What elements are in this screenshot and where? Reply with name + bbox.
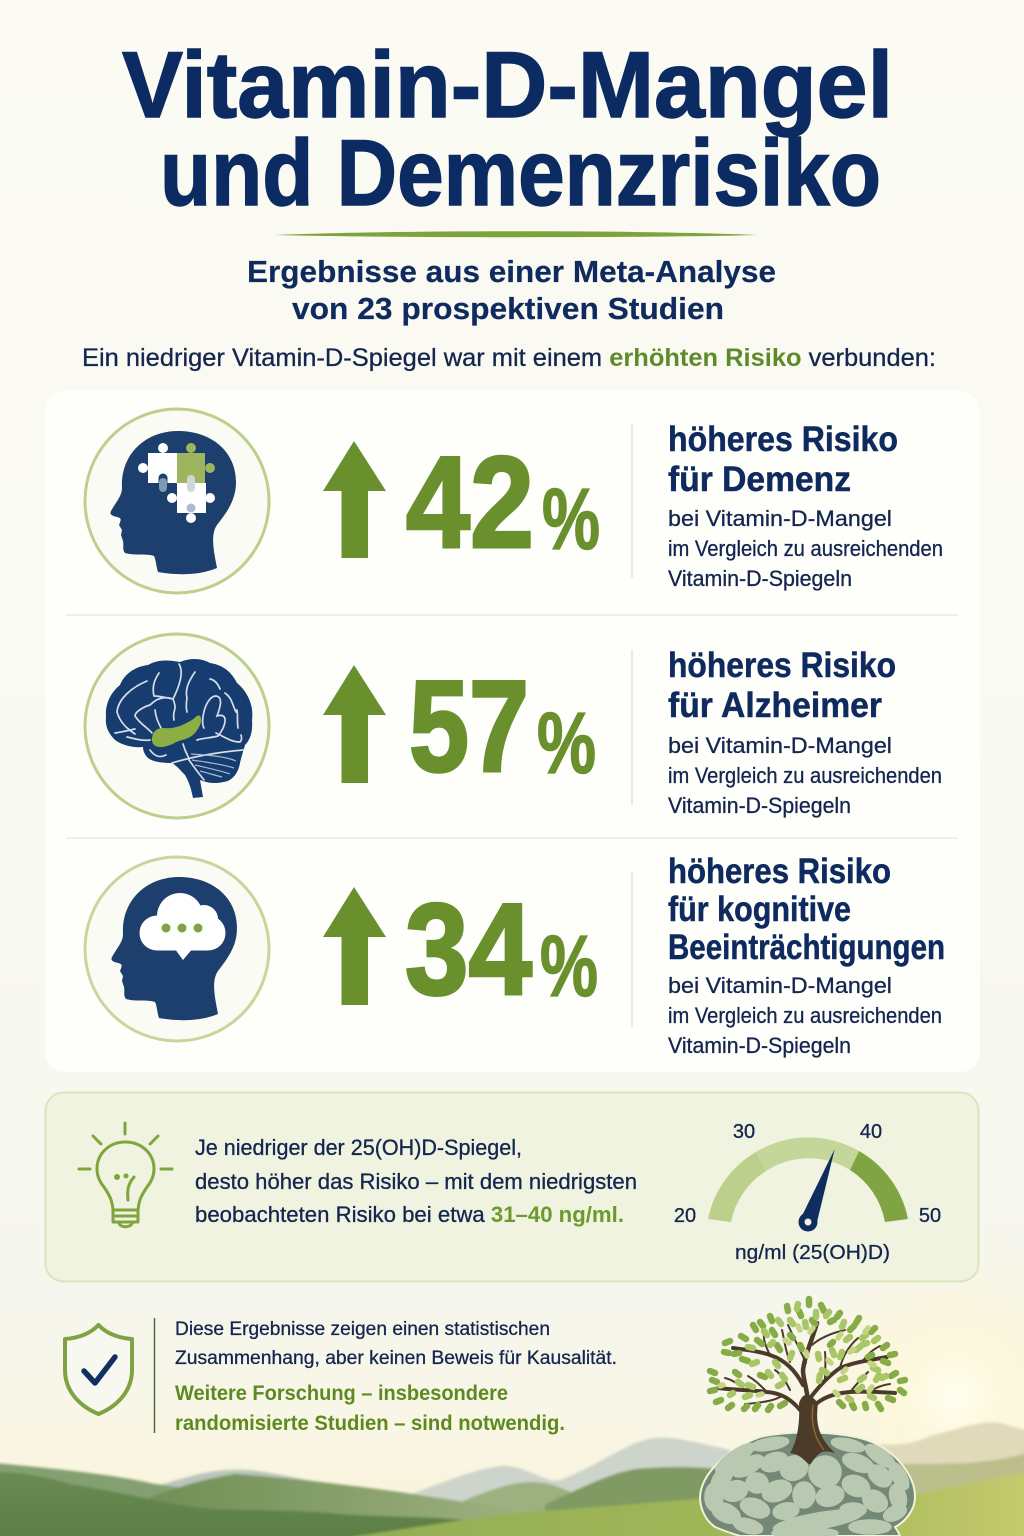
text: Alzheimer risk: höheres Risiko — [668, 646, 896, 685]
row: Alzheimer — [85, 634, 942, 818]
chart: gauge — [674, 1121, 941, 1264]
arrow up — [323, 887, 386, 1005]
text: dementia risk: Vitamin-D-Spiegeln — [668, 566, 852, 591]
title underline — [275, 231, 758, 237]
tree branches — [718, 1323, 895, 1410]
arrow up — [323, 665, 386, 783]
chart: gauge: 50 — [919, 1205, 941, 1227]
text: cognitive risk: Beeinträchtigungen — [668, 928, 945, 967]
text: conclusion: Weitere Forschung – insbesondere — [175, 1382, 508, 1405]
title: Vitamin-D-Mangel — [122, 32, 893, 137]
chart: gauge: ng/ml (25(OH)D) — [735, 1242, 890, 1264]
text: conclusion: Zusammenhang, aber keinen Beweis für Kausalität. — [175, 1347, 617, 1369]
text: Alzheimer risk: im Vergleich zu ausreichenden — [668, 763, 942, 788]
row: dementia — [85, 409, 943, 593]
divider line — [154, 1318, 156, 1433]
panel: dose-response callout — [46, 1092, 978, 1282]
number: 42 percent: 42 — [406, 429, 534, 575]
chart: gauge: 20 — [674, 1205, 696, 1227]
tree leaves — [710, 1299, 905, 1410]
text: lowest risk range: beobachteten Risiko bei etwa 31–40 ng/ml. — [195, 1202, 624, 1227]
text: cognitive risk — [668, 852, 945, 1058]
brain base — [700, 1432, 915, 1536]
tree trunk — [790, 1395, 835, 1464]
number: 42 percent: % — [542, 472, 600, 568]
icon: head with puzzle — [85, 409, 269, 593]
text: conclusion: randomisierte Studien – sind notwendig. — [175, 1412, 565, 1435]
text: cognitive risk: für kognitive — [668, 890, 851, 929]
text: dementia risk: im Vergleich zu ausreichenden — [668, 536, 943, 561]
chart: gauge: 30 — [733, 1121, 755, 1143]
number: 57 percent: % — [537, 696, 596, 792]
landscape: hills and meadow — [0, 1422, 1024, 1536]
text: Alzheimer risk: bei Vitamin-D-Mangel — [668, 733, 892, 758]
subtitle: Ergebnisse aus einer Meta-Analyse — [247, 254, 776, 289]
text: cognitive risk: im Vergleich zu ausreichenden — [668, 1003, 942, 1028]
text: cognitive risk: Vitamin-D-Spiegeln — [668, 1033, 851, 1058]
text: dementia risk — [668, 420, 943, 591]
subtitle: von 23 prospektiven Studien — [292, 291, 724, 326]
tree trunk highlight — [812, 1405, 824, 1450]
illustration: tree growing from brain — [700, 1299, 915, 1536]
intro sentence: Ein niedriger Vitamin-D-Spiegel war mit einem erhöhten Risiko verbunden: — [82, 344, 936, 372]
text: cognitive risk: höheres Risiko — [668, 852, 891, 891]
arrow up — [323, 441, 386, 558]
text: lowest risk range — [195, 1135, 637, 1227]
icon: brain — [85, 634, 269, 818]
text: Alzheimer risk — [668, 646, 942, 818]
number: 57 percent: 57 — [409, 653, 529, 799]
icon: shield with check — [65, 1325, 132, 1414]
text: lowest risk range: desto höher das Risiko – mit dem niedrigsten — [195, 1169, 637, 1194]
chart: gauge: 40 — [860, 1121, 882, 1143]
subtitle — [247, 254, 776, 326]
row: cognitive impairment — [85, 852, 945, 1058]
text: dementia risk: höheres Risiko — [668, 420, 898, 459]
text: dementia risk: für Demenz — [668, 460, 851, 499]
number: 34 percent: 34 — [405, 876, 532, 1022]
text: dementia risk: bei Vitamin-D-Mangel — [668, 506, 892, 531]
icon: head with thought cloud — [85, 857, 269, 1041]
text: cognitive risk: bei Vitamin-D-Mangel — [668, 973, 892, 998]
text: conclusion: Diese Ergebnisse zeigen einen statistischen — [175, 1318, 550, 1340]
icon: light bulb — [79, 1123, 172, 1227]
text: Alzheimer risk: Vitamin-D-Spiegeln — [668, 793, 851, 818]
text: Alzheimer risk: für Alzheimer — [668, 686, 882, 725]
title: und Demenzrisiko — [160, 120, 881, 225]
panel: risk findings — [45, 391, 980, 1072]
text: lowest risk range: Je niedriger der 25(OH)D-Spiegel, — [195, 1135, 522, 1160]
title — [122, 32, 893, 225]
text: conclusion — [175, 1318, 617, 1435]
number: 34 percent: % — [540, 919, 598, 1015]
